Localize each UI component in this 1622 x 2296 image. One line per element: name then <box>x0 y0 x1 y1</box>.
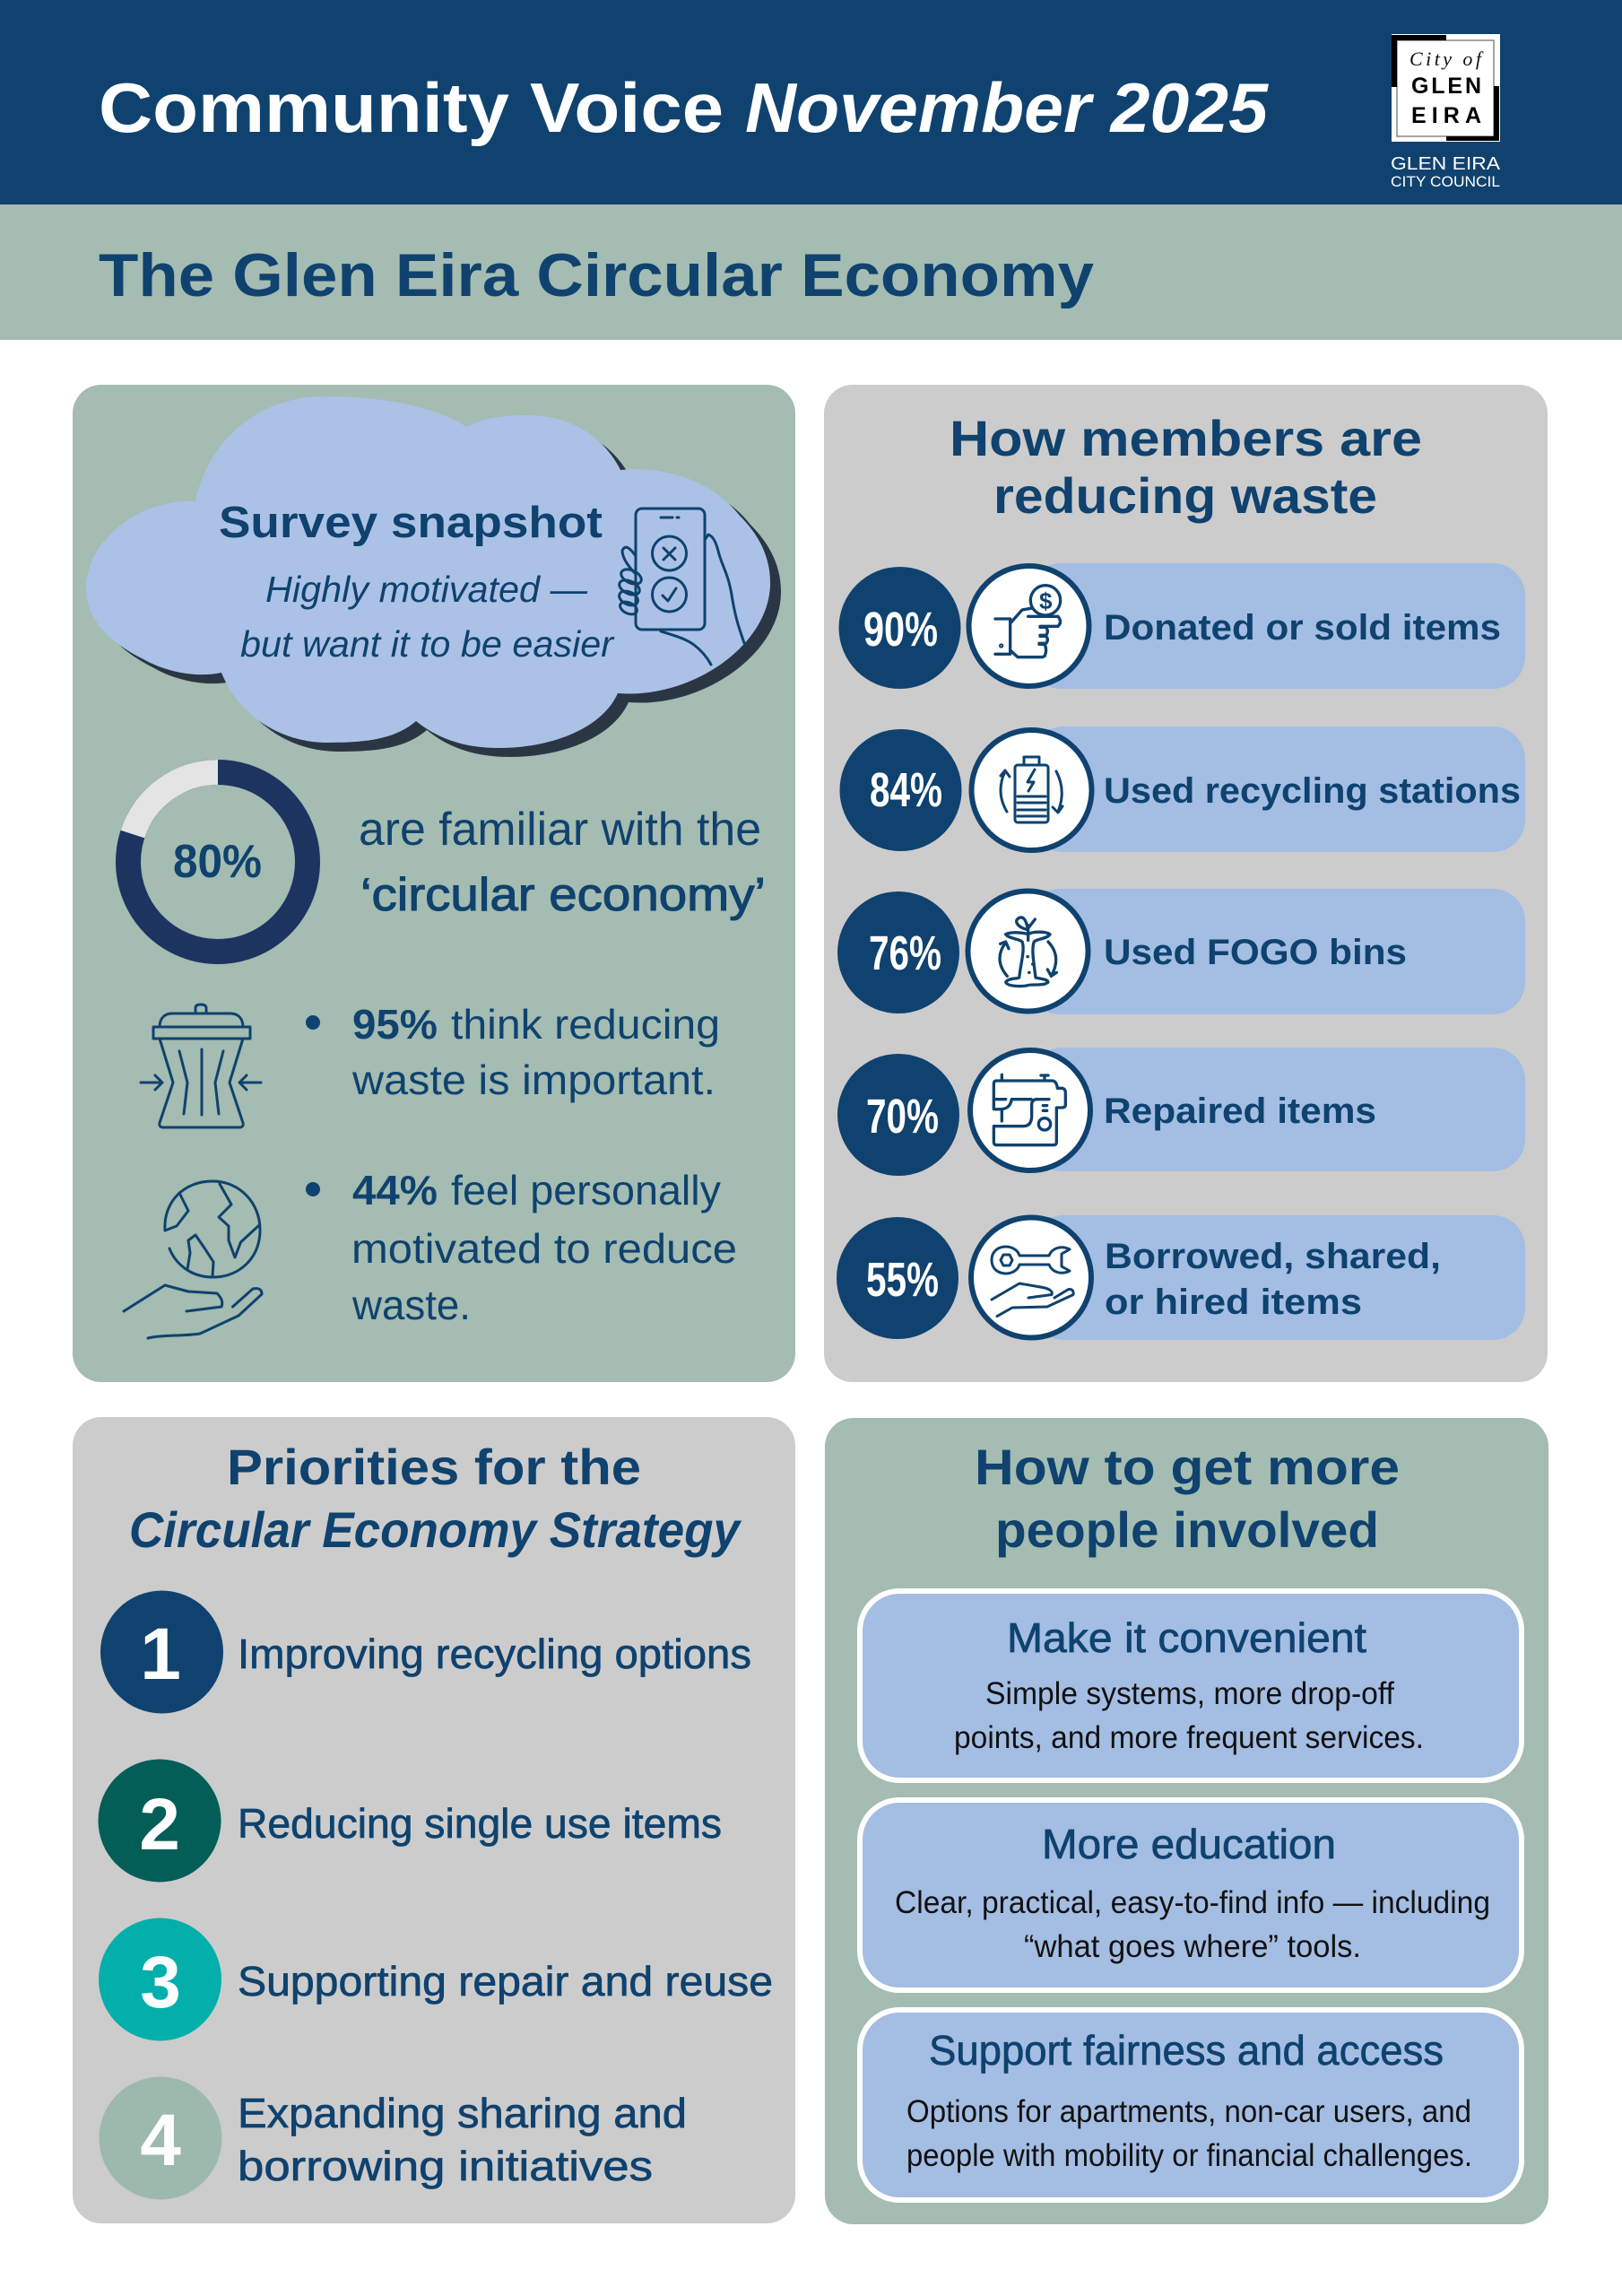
panel: survey snapshot <box>73 385 795 1382</box>
title: November 2025 <box>745 68 1270 147</box>
panel: priorities <box>73 1417 795 2223</box>
panel heading: Circular Economy Strategy <box>129 1501 742 1558</box>
icon: compressed bin <box>141 1004 261 1127</box>
row: 55% borrowed: or hired items <box>1105 1283 1362 1322</box>
priority 2: 2 <box>139 1784 180 1866</box>
row: 76% FOGO bins <box>837 889 1525 1014</box>
row: 84% recycling stations <box>839 726 1525 852</box>
row: 76% FOGO bins: 76% <box>869 926 941 980</box>
subtitle: The Glen Eira Circular Economy <box>99 241 1094 309</box>
bullet: 44%: 44% <box>352 1167 438 1213</box>
card: make it convenient: Simple systems, more drop-off <box>985 1676 1394 1711</box>
familiar statement <box>359 804 766 921</box>
card: make it convenient <box>860 1591 1522 1780</box>
priority 3: 3 <box>140 1942 181 2023</box>
card: support fairness and access: people with mobility or financial challenges. <box>906 2138 1472 2173</box>
icon: hand with coin <box>995 586 1061 657</box>
icon: apple core <box>1000 918 1056 987</box>
cloud subheading: Highly motivated — <box>265 569 588 610</box>
card: support fairness and access: Options for apartments, non-car users, and <box>906 2094 1471 2129</box>
priority 4: Expanding sharing and <box>238 2090 687 2136</box>
cloud callout <box>86 396 781 757</box>
row: 70% repaired: 70% <box>866 1090 939 1144</box>
card: more education <box>860 1800 1522 1990</box>
subtitle band <box>0 204 1622 340</box>
panel heading: reducing waste <box>993 467 1377 524</box>
bullet: 44% <box>306 1167 737 1328</box>
bullet: 95%: think reducing <box>451 1001 720 1048</box>
logo: City of Glen Eira: GLEN <box>1411 74 1481 99</box>
row: 70% repaired: Repaired items <box>1104 1091 1376 1131</box>
icon: hand holding globe <box>124 1181 262 1338</box>
bullet: 44%: motivated to reduce <box>351 1225 737 1272</box>
bullet: 95%: waste is important. <box>351 1057 716 1103</box>
panel heading <box>950 410 1422 524</box>
bullet: 95% <box>306 1001 720 1103</box>
icon: hand holding phone <box>617 509 744 665</box>
panel heading: How members are <box>950 410 1422 466</box>
row: 90% donated or sold <box>839 563 1525 689</box>
priority 2 <box>99 1760 722 1882</box>
row: 55% borrowed: Borrowed, shared, <box>1105 1237 1441 1276</box>
row: 84% recycling stations: 84% <box>870 763 942 817</box>
card: more education: “what goes where” tools. <box>1024 1929 1361 1964</box>
panel heading: Priorities for the <box>227 1439 641 1495</box>
priority 3 <box>99 1918 773 2041</box>
panel heading <box>129 1439 742 1558</box>
row: 55% borrowed: 55% <box>866 1253 939 1307</box>
row: 76% FOGO bins: Used FOGO bins <box>1104 933 1407 972</box>
icon: wrench and hand <box>992 1247 1073 1317</box>
logo: City of Glen Eira: CITY COUNCIL <box>1391 173 1500 190</box>
row: 55% borrowed <box>837 1215 1525 1340</box>
panel heading <box>975 1439 1400 1558</box>
card: make it convenient: Make it convenient <box>1007 1614 1366 1661</box>
priority 3: Supporting repair and reuse <box>238 1958 773 2005</box>
card: more education: More education <box>1042 1821 1336 1867</box>
familiar statement: are familiar with the <box>359 804 761 856</box>
panel heading: people involved <box>995 1501 1379 1558</box>
bullet: 44%: feel personally <box>451 1167 721 1213</box>
logo: City of Glen Eira <box>1391 34 1501 190</box>
donut chart: 80% <box>128 772 308 952</box>
title <box>99 68 1270 147</box>
row: 84% recycling stations: Used recycling stations <box>1104 771 1521 811</box>
priority 4: 4 <box>140 2100 181 2181</box>
row: 90% donated or sold: 90% <box>863 603 938 657</box>
card: support fairness and access <box>860 2010 1522 2200</box>
row: 90% donated or sold: $ <box>1039 587 1053 614</box>
cloud subheading <box>240 569 615 665</box>
icon: battery recycling <box>1001 757 1063 822</box>
cloud heading: Survey snapshot <box>219 499 603 547</box>
priority 4: borrowing initiatives <box>238 2143 653 2189</box>
priority 1: Improving recycling options <box>238 1631 751 1677</box>
header banner <box>0 0 1622 204</box>
familiar statement: ‘circular economy’ <box>360 869 766 921</box>
priority 4 <box>99 2077 687 2199</box>
row: 70% repaired <box>837 1048 1525 1176</box>
priority 1 <box>100 1591 751 1713</box>
bullet: 44%: waste. <box>351 1282 471 1328</box>
priority 1: 1 <box>140 1613 181 1695</box>
panel: how to get more people involved <box>825 1418 1548 2224</box>
panel: how members are reducing waste <box>824 385 1548 1382</box>
logo: City of Glen Eira: City of <box>1409 48 1484 70</box>
card: support fairness and access: Support fairness and access <box>929 2027 1444 2074</box>
icon: sewing machine <box>993 1074 1065 1145</box>
cloud subheading: but want it to be easier <box>240 623 615 665</box>
panel heading: How to get more <box>975 1439 1400 1495</box>
logo: City of Glen Eira: GLEN EIRA <box>1391 154 1501 174</box>
donut chart: 80%: 80% <box>173 836 262 888</box>
title: Community Voice <box>99 68 724 147</box>
card: make it convenient: points, and more frequent services. <box>954 1720 1424 1755</box>
row: 90% donated or sold: Donated or sold items <box>1104 608 1501 648</box>
card: more education: Clear, practical, easy-to-find info — including <box>895 1885 1490 1920</box>
priority 2: Reducing single use items <box>238 1800 722 1847</box>
bullet: 95%: 95% <box>352 1001 438 1048</box>
logo: City of Glen Eira: EIRA <box>1411 103 1481 128</box>
